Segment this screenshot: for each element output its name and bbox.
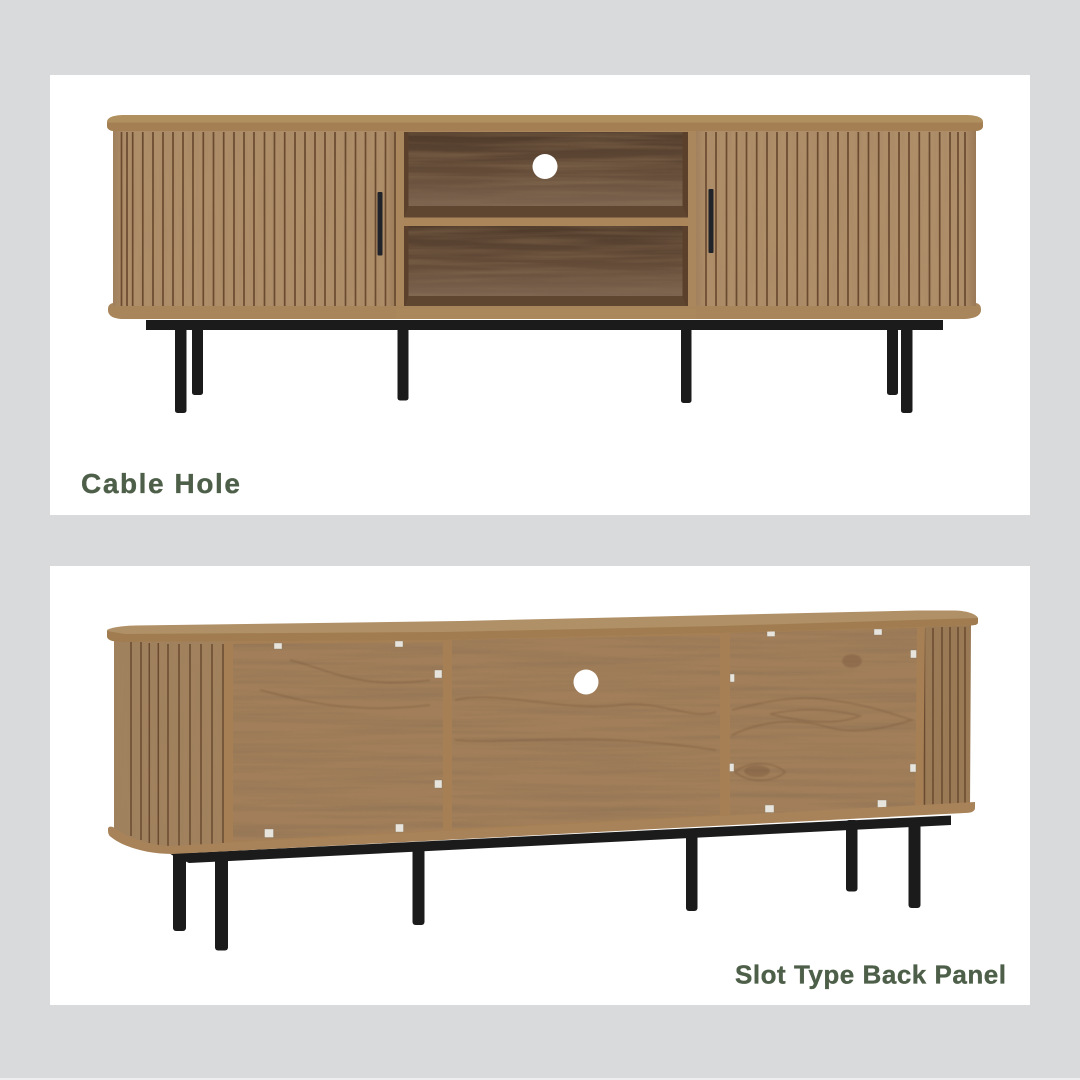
open shelf compartment <box>396 130 696 316</box>
door handles <box>378 189 714 256</box>
left sliding door <box>113 130 397 308</box>
right sliding door <box>695 130 976 308</box>
top board <box>107 115 983 131</box>
panel: cable hole view <box>50 75 1030 515</box>
cable hole <box>532 154 558 179</box>
panel clips <box>264 629 916 838</box>
label: slot type back panel: Slot Type Back Panel <box>735 960 1006 990</box>
bottom board <box>108 303 981 319</box>
top board <box>107 610 978 642</box>
metal legs and rail <box>165 816 951 950</box>
panel: slot type back panel view <box>50 566 1030 1005</box>
cabinet body with slats <box>114 625 971 851</box>
cabinet back view <box>107 610 978 950</box>
bottom board <box>108 802 975 854</box>
label: cable hole: Cable Hole <box>81 468 240 499</box>
cabinet front view <box>107 115 983 413</box>
cable hole <box>574 670 598 694</box>
metal legs <box>146 320 943 413</box>
slot back panels <box>225 625 925 845</box>
back panel frames <box>224 626 925 844</box>
wood grain figure <box>260 655 912 780</box>
